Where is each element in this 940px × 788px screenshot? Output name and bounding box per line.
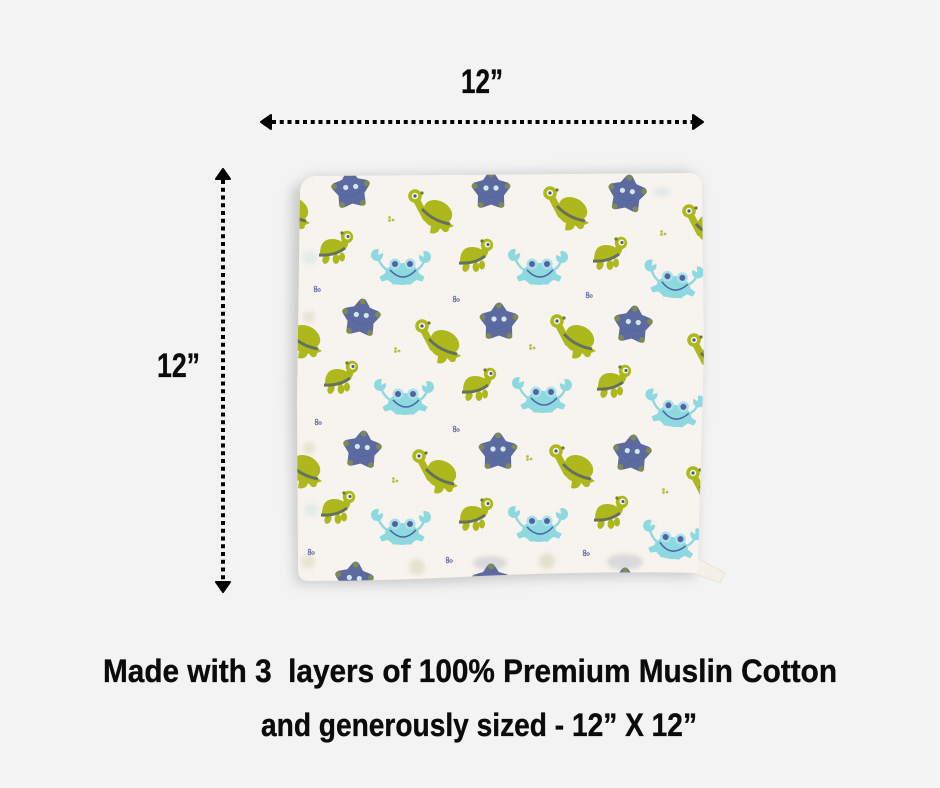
cloth surface: [297, 173, 704, 581]
tiny bubbles: [308, 216, 668, 563]
caption: [103, 653, 837, 743]
hanging loop: [691, 556, 725, 583]
large turtles: [264, 186, 735, 510]
print pattern: [297, 174, 704, 581]
left height measurement: [157, 169, 230, 592]
caption line 1: Made with 3 layers of 100% Premium Muslin Cotton: [103, 653, 837, 689]
starfish: [330, 169, 654, 604]
double arrow: vertical dotted: [216, 169, 230, 592]
muslin cloth product photo: [264, 169, 735, 604]
top width measurement: [261, 63, 703, 129]
double arrow: horizontal dotted: [261, 115, 703, 129]
crabs: [371, 247, 706, 563]
caption line 2: and generously sized - 12” X 12”: [261, 707, 697, 743]
bleed-through smudges: [301, 187, 671, 575]
height label: 12”: [157, 347, 200, 385]
small turtles: [319, 231, 631, 532]
width label: 12”: [461, 63, 503, 101]
